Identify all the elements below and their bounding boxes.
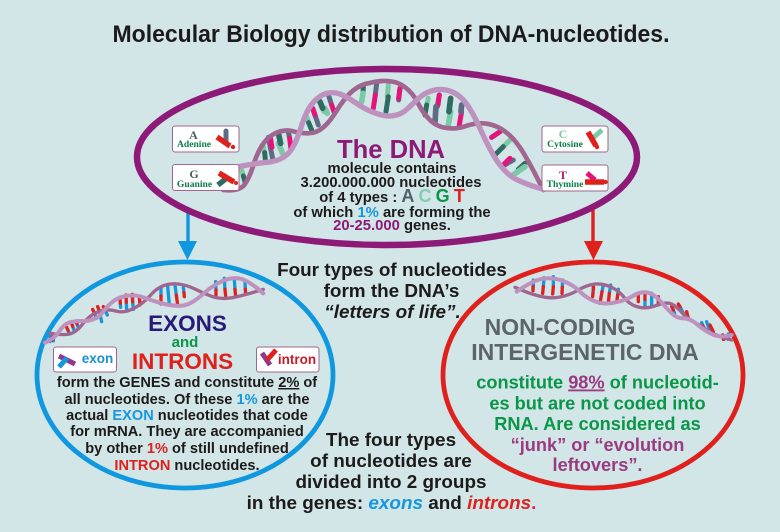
text block: groups in genes: divided into 2 groups (295, 472, 487, 493)
text block: exons description: all nucleotides. Of these 1% are the (65, 392, 309, 408)
illustration: exon helix (45, 278, 263, 343)
text block: groups in genes: in the genes: exons and introns. (247, 493, 536, 514)
heading: non-coding intergenetic DNA (471, 314, 699, 365)
icon card: adenine (172, 126, 239, 152)
icon card: adenine: Adenine (177, 139, 212, 150)
text block: DNA description: of which 1% are forming the (293, 205, 491, 221)
panel: non-coding DNA ellipse (443, 262, 743, 488)
text block: exons description: for mRNA. They are accompanied (70, 424, 304, 440)
heading: non-coding intergenetic DNA: NON-CODING (485, 314, 635, 340)
text block: exons description (57, 375, 317, 474)
text block: DNA description: of 4 types : A C G T (319, 186, 465, 206)
text block: letters of life: form the DNA’s (324, 281, 459, 302)
arrow: red to non-coding (584, 210, 603, 260)
icon card: intron: intron (278, 352, 316, 367)
text block: groups in genes (247, 430, 536, 514)
icon card: adenine: A (189, 128, 198, 142)
icon card: thymine: Thymine (547, 179, 584, 190)
text block: letters of life: Four types of nucleotides (277, 260, 507, 281)
heading: EXONS: EXONS (148, 311, 227, 336)
icon card: exon: exon (82, 351, 113, 366)
illustration: main DNA helix (223, 81, 543, 190)
text block: exons description: INTRON nucleotides. (114, 458, 260, 474)
panel: exons and introns ellipse (37, 262, 333, 488)
icon card: thymine: T (559, 168, 567, 182)
icon card: guanine: G (189, 167, 199, 181)
icon card: cytosine: C (559, 127, 567, 141)
heading: The DNA: The DNA (337, 136, 445, 164)
text block: letters of life: “letters of life”. (324, 302, 461, 323)
arrow: blue to exons (178, 212, 197, 260)
icon card: cytosine (542, 126, 608, 152)
text block: exons description: actual EXON nucleotides that code (66, 408, 308, 424)
text block: groups in genes: The four types (326, 430, 456, 451)
panel: the DNA ellipse (137, 69, 637, 245)
text block: DNA description: 3.200.000.000 nucleotides (301, 175, 481, 191)
text block: non-coding description: constitute 98% of nucleotid- (476, 372, 719, 392)
text block: exons description: form the GENES and constitute 2% of (57, 375, 317, 391)
heading: non-coding intergenetic DNA: INTERGENETIC DNA (471, 339, 699, 365)
text block: DNA description (293, 161, 491, 234)
text block: groups in genes: of nucleotides are (310, 451, 472, 472)
text block: exons description: by other 1% of still undefined (85, 441, 289, 457)
text block: DNA description: molecule contains (327, 161, 457, 177)
illustration: non-coding helix (515, 277, 732, 340)
text block: non-coding description: “junk” or “evolution (511, 435, 684, 455)
heading: INTRONS: INTRONS (132, 349, 233, 374)
icon card: exon (54, 347, 116, 372)
text block: non-coding description: leftovers”. (553, 455, 642, 475)
text block: non-coding description (476, 372, 719, 475)
icon card: thymine (542, 165, 608, 191)
heading: and: and (172, 334, 198, 351)
icon card: guanine (172, 164, 239, 190)
text block: non-coding description: es but are not coded into (489, 394, 706, 414)
icon card: intron (256, 347, 319, 372)
icon card: guanine: Guanine (177, 179, 213, 190)
text block: DNA description: 20-25.000 genes. (333, 218, 451, 234)
icon card: cytosine: Cytosine (547, 139, 584, 150)
text block: letters of life (277, 260, 507, 323)
title: Molecular Biology distribution of DNA-nucleotides. (112, 22, 670, 48)
text block: non-coding description: RNA. Are considered as (494, 414, 701, 434)
